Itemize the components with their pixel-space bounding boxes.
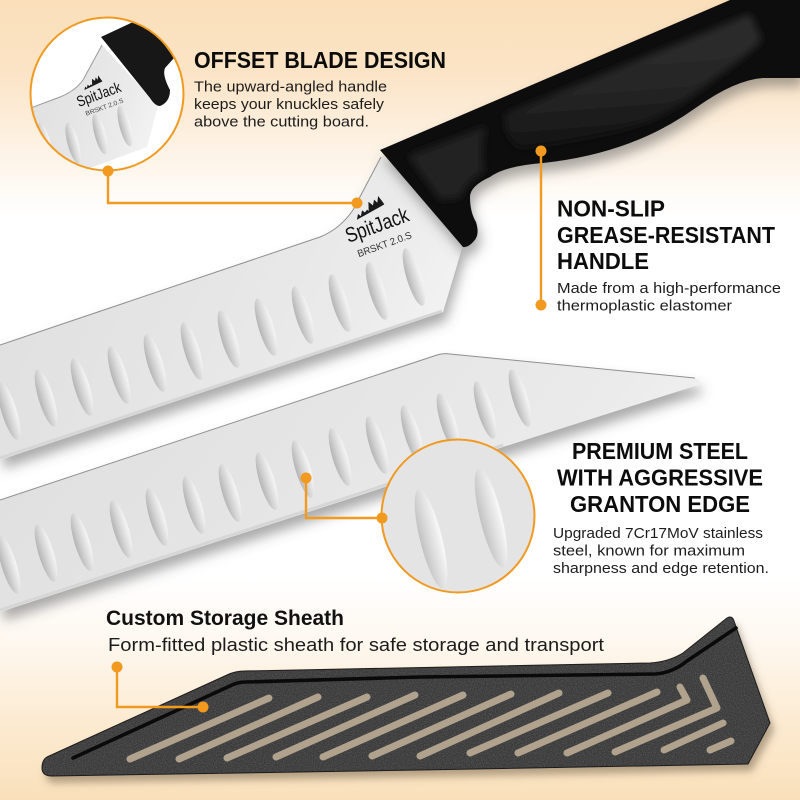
text block: premium steel: sharpness and edge retention. [553, 560, 769, 577]
zoom circle: granton edge detail [381, 439, 535, 593]
text block: non-slip handle: HANDLE [557, 248, 649, 274]
logo: SpitJack: SpitJack [342, 203, 412, 248]
text block: offset blade design: keeps your knuckles safely [194, 96, 385, 113]
text block: premium steel: PREMIUM STEEL [572, 438, 748, 464]
text block: premium steel: WITH AGGRESSIVE [557, 464, 763, 490]
text block: offset blade design [194, 47, 446, 130]
storage sheath [42, 617, 770, 776]
callout connector: sheath [112, 662, 208, 712]
lower knife blade with grooves [0, 354, 700, 612]
text block: premium steel: GRANTON EDGE [570, 491, 750, 517]
upper knife: blade and handle [0, 0, 800, 460]
callout connector: granton edge [300, 472, 388, 524]
text block: non-slip handle: NON-SLIP [557, 196, 665, 222]
zoom circle: offset blade detail: SpitJack [74, 79, 124, 111]
text block: premium steel: steel, known for maximum [553, 542, 745, 560]
text block: premium steel: Upgraded 7Cr17MoV stainless [553, 525, 763, 542]
text block: non-slip handle: Made from a high-performance [557, 280, 781, 297]
logo: SpitJack: BRSKT 2.0.S [356, 230, 414, 260]
text block: offset blade design: OFFSET BLADE DESIGN [194, 47, 446, 73]
callout connector: offset blade [102, 166, 362, 208]
sheath vents [130, 678, 731, 759]
zoom circle: offset blade detail [30, 16, 184, 172]
logo: SpitJack [337, 188, 418, 262]
text block: premium steel [553, 438, 769, 577]
handle [380, 0, 800, 247]
blade with logo and grooves [0, 155, 463, 460]
text block: offset blade design: above the cutting board. [194, 114, 369, 130]
text block: non-slip handle: GREASE-RESISTANT [557, 222, 776, 248]
text block: custom storage sheath: Custom Storage Sheath [106, 607, 344, 630]
sheath slit [73, 628, 736, 758]
text block: custom storage sheath: Form-fitted plastic sheath for safe storage and transport [108, 634, 604, 655]
text block: custom storage sheath [106, 607, 604, 655]
zoom circle: offset blade detail: BRSKT 2.0.S [85, 97, 125, 118]
text block: non-slip handle: thermoplastic elastomer [557, 298, 732, 314]
callout connector: handle [536, 146, 546, 310]
text block: offset blade design: The upward-angled handle [194, 78, 387, 96]
text block: non-slip handle [557, 196, 781, 314]
